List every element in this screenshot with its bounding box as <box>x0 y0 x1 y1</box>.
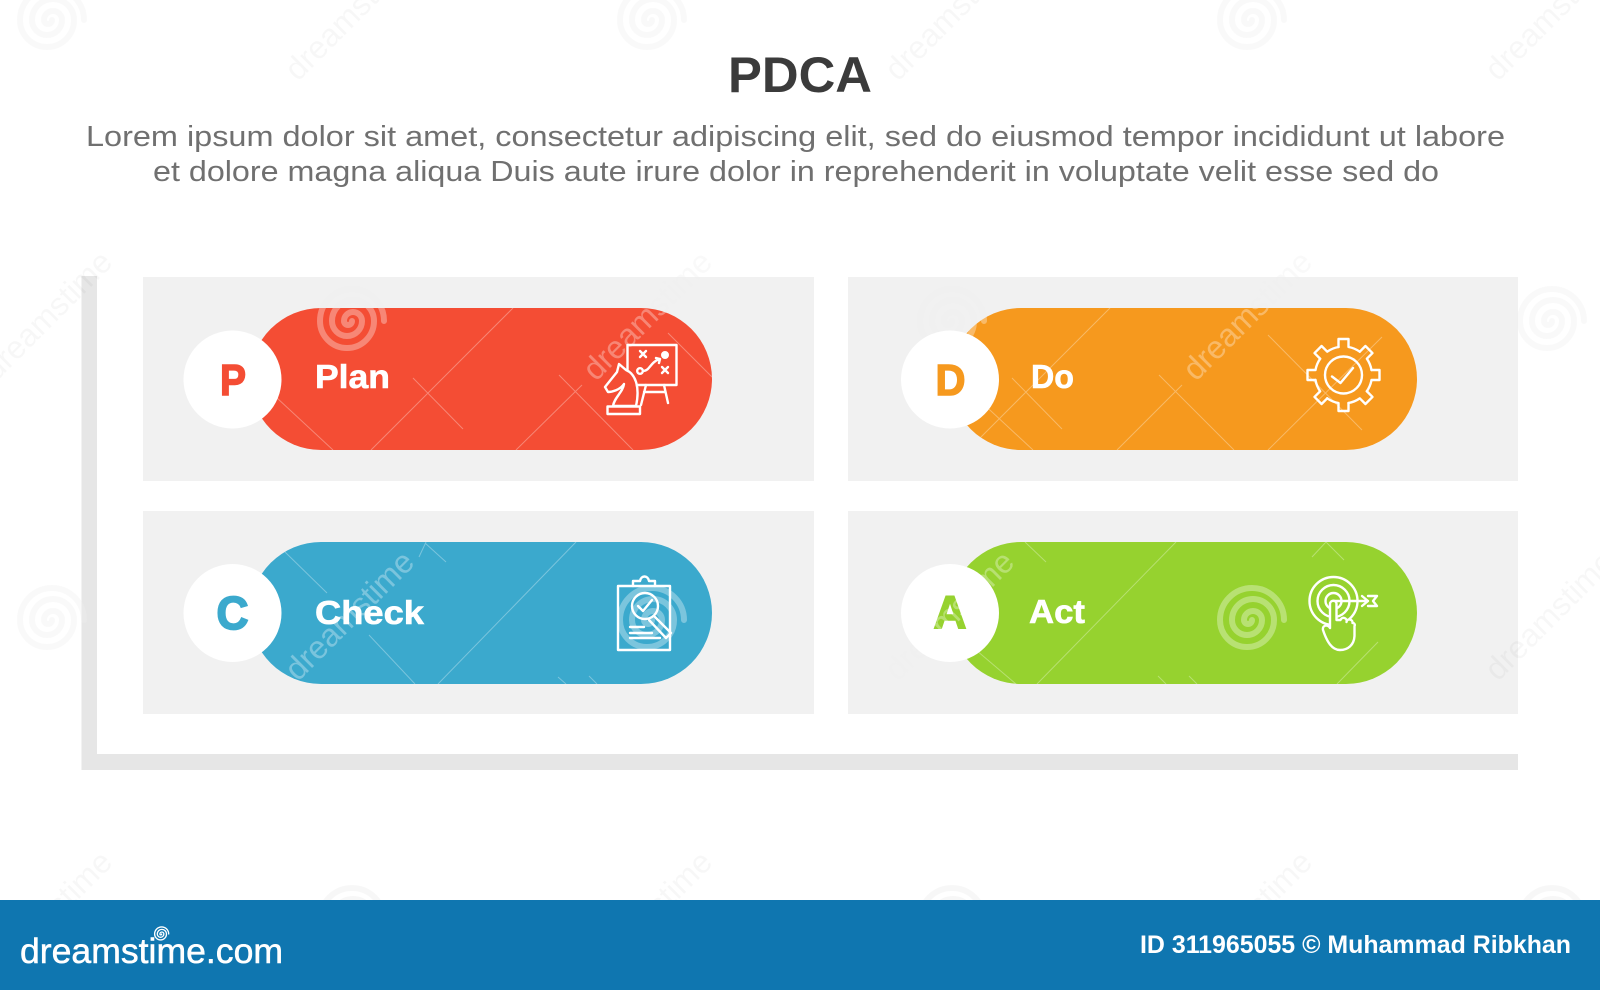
title: PDCA <box>728 47 872 103</box>
icon: target with arrow and hand <box>1310 577 1377 650</box>
panel: Act <box>901 542 1417 684</box>
panel: Do <box>901 308 1417 450</box>
Do pill <box>950 308 1417 450</box>
subtitle text block <box>86 121 1505 188</box>
white watermark overlay <box>20 0 1584 687</box>
Plan label: Plan <box>315 358 390 395</box>
Act letter badge: A <box>934 586 966 638</box>
Check label: Check <box>315 594 425 631</box>
faint grey watermark layer: dreamstime <box>277 543 421 687</box>
Do watermark lines <box>968 308 1382 450</box>
Act label: Act <box>1029 593 1085 630</box>
icon: clipboard and magnifier <box>618 576 671 650</box>
white watermark overlay: dreamstime <box>877 543 1021 687</box>
L-shaped axis frame <box>82 276 1518 770</box>
Plan letter badge <box>184 330 282 428</box>
white watermark overlay: dreamstime <box>1175 243 1319 387</box>
icon: gear with check <box>1307 338 1380 412</box>
Do letter badge: D <box>936 356 966 405</box>
Check letter badge <box>184 564 282 662</box>
faint grey watermark layer: dreamstime <box>1175 243 1319 387</box>
Plan watermark lines <box>277 308 712 450</box>
white watermark overlay: dreamstime <box>277 543 421 687</box>
subtitle text block: et dolore magna aliqua Duis aute irure dolor in reprehenderit in voluptate velit esse sed do <box>153 156 1439 188</box>
faint grey watermark layer: dreamstime <box>575 243 719 387</box>
footer bar <box>0 900 1600 990</box>
white watermark overlay: dreamstime <box>575 243 719 387</box>
panel: Check <box>184 542 712 684</box>
panel backgrounds <box>143 277 1518 714</box>
Act letter badge <box>901 564 999 662</box>
Check pill <box>250 542 712 684</box>
faint grey watermark layer: dreamstime <box>575 843 719 987</box>
Act pill <box>950 542 1417 684</box>
Check watermark lines <box>285 542 597 684</box>
subtitle text block: Lorem ipsum dolor sit amet, consectetur adipiscing elit, sed do eiusmod tempor incididunt ut labore <box>86 121 1505 153</box>
Plan pill <box>250 308 712 450</box>
footer logo: dreamstime.com <box>20 932 283 971</box>
Act watermark lines <box>976 542 1378 684</box>
Check letter badge: C <box>216 587 248 639</box>
icon: chess knight and strategy board <box>605 345 676 414</box>
faint grey watermark layer: dreamstime <box>1175 843 1319 987</box>
Plan letter badge: P <box>220 356 246 405</box>
faint grey watermark layer: dreamstime <box>877 543 1021 687</box>
Do label: Do <box>1031 358 1074 395</box>
Do letter badge <box>901 330 999 428</box>
footer credit: ID 311965055 © Muhammad Ribkhan <box>1140 931 1571 959</box>
panel: Plan <box>184 308 712 450</box>
